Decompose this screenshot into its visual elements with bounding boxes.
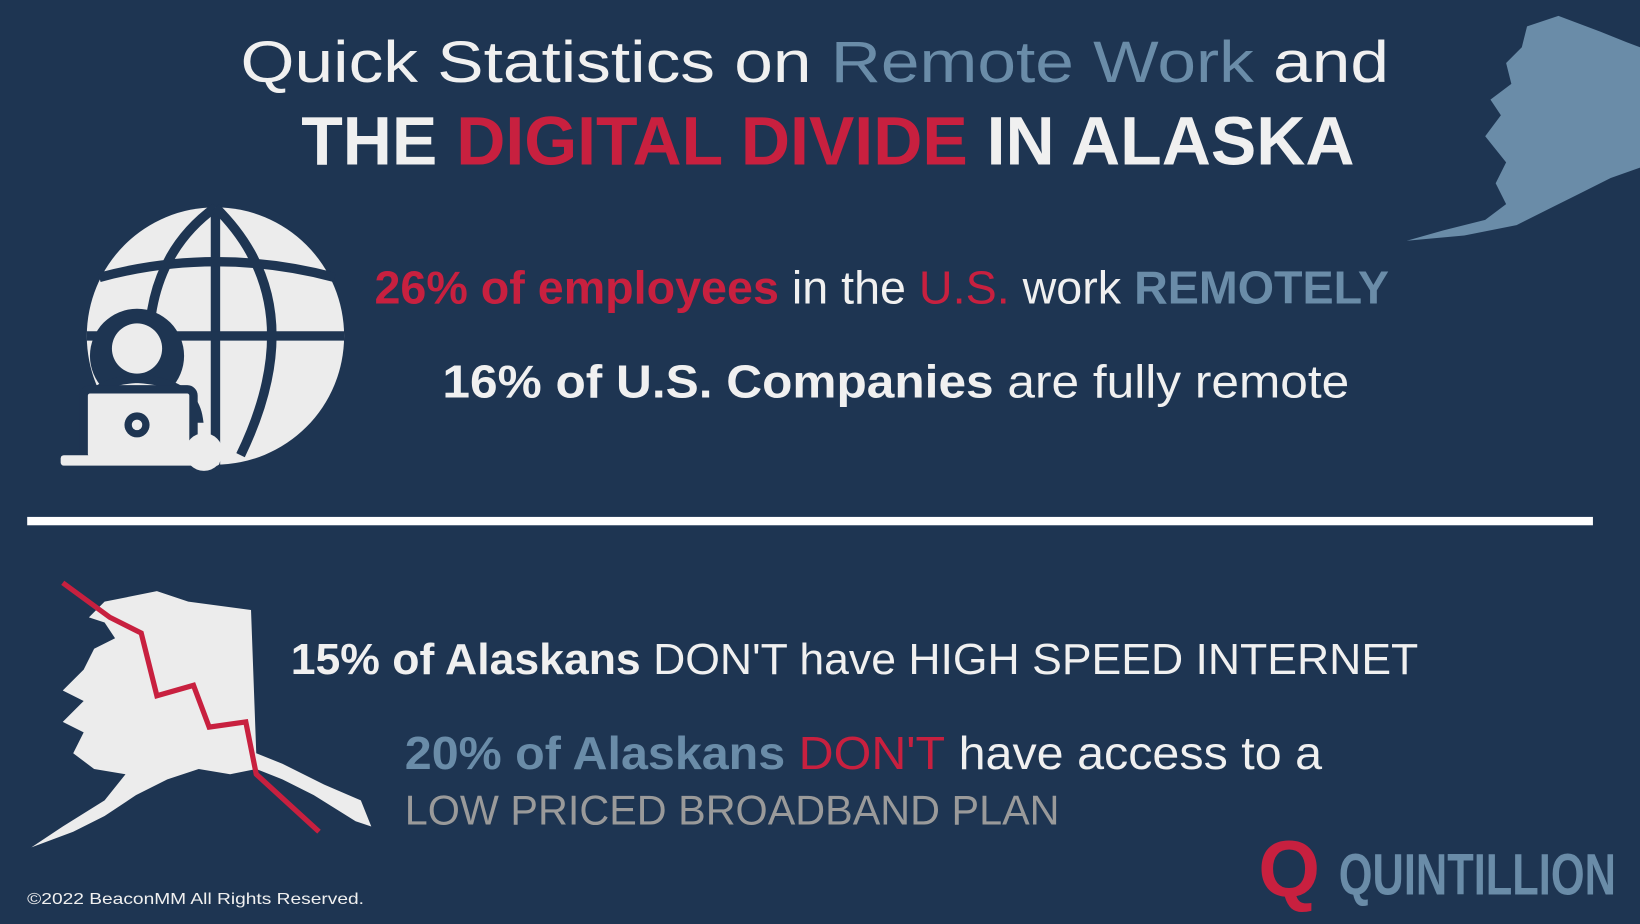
logo: quintillion <box>1258 825 1616 914</box>
copyright: ©2022 BeaconMM All Rights Reserved. <box>27 891 364 908</box>
map: alaska with divide crack <box>31 583 371 847</box>
stat: 20% alaskans: 20% of Alaskans DON'T have access to a <box>405 727 1322 779</box>
stat: 26% employees: 26% of employees in the U.S. work REMOTELY <box>374 262 1389 314</box>
stat: 16% companies: 16% of U.S. Companies are fully remote <box>442 356 1349 408</box>
title <box>241 30 1389 179</box>
stat: 20% alaskans: LOW PRICED BROADBAND PLAN <box>405 786 1060 833</box>
map: alaska top right <box>1407 16 1640 241</box>
stat: 20% alaskans <box>405 727 1322 833</box>
logo: quintillion: Q <box>1258 825 1320 914</box>
icon: globe with remote worker <box>61 207 344 471</box>
stat: 15% alaskans: 15% of Alaskans DON'T have HIGH SPEED INTERNET <box>291 635 1418 684</box>
title: Quick Statistics on Remote Work and <box>241 30 1389 95</box>
title: THE DIGITAL DIVIDE IN ALASKA <box>301 102 1354 179</box>
